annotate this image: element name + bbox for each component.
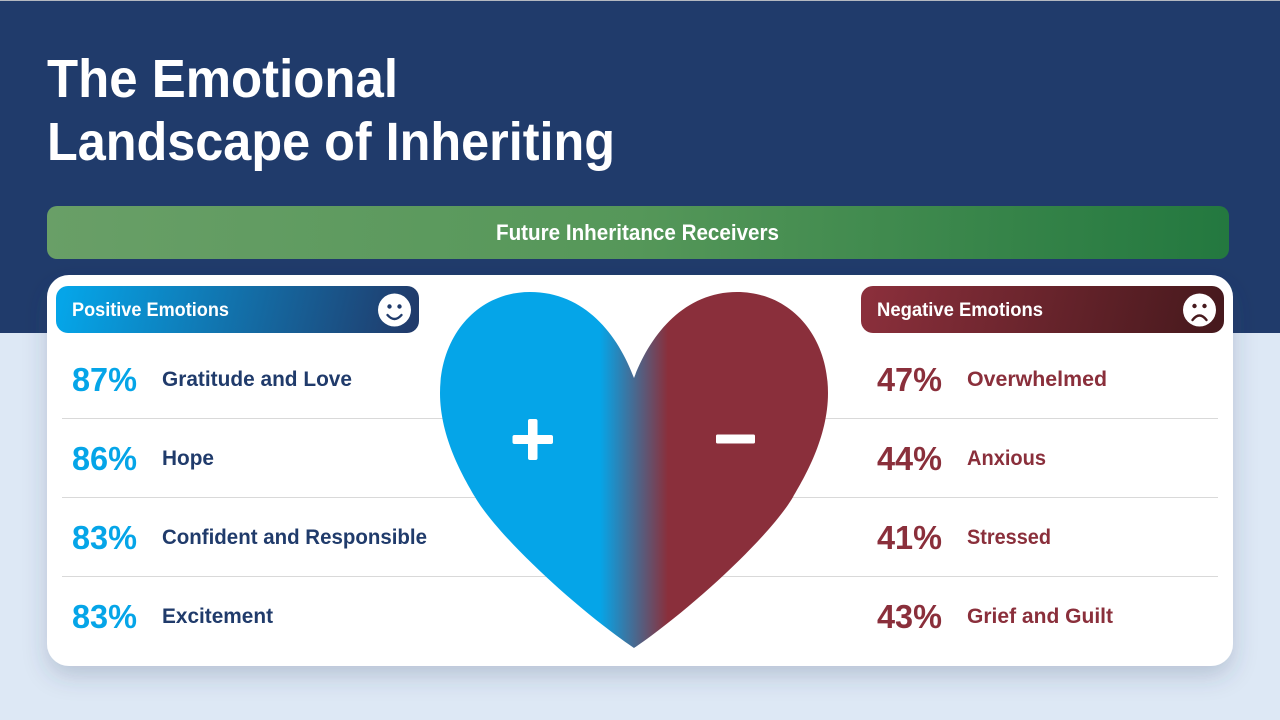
panel: negative emotions <box>861 286 1224 636</box>
row: 83% confident and responsible: Confident and Responsible <box>162 526 427 549</box>
heart graphic <box>440 292 828 648</box>
row: 43% grief and guilt: 43% <box>877 599 942 636</box>
heart shape <box>440 292 828 648</box>
row: 47% overwhelmed <box>877 362 1107 399</box>
header band <box>0 0 1280 333</box>
row: 44% anxious: Anxious <box>967 447 1046 470</box>
row: 83% excitement <box>72 599 273 636</box>
banner: future inheritance receivers <box>47 206 1229 259</box>
row: 86% hope: Hope <box>162 447 214 470</box>
icon: plus sign <box>512 419 553 460</box>
row: 83% excitement: Excitement <box>162 605 273 628</box>
row: 44% anxious: 44% <box>877 441 942 478</box>
positive header bar: Positive Emotions <box>72 300 229 321</box>
row: 41% stressed: 41% <box>877 520 942 557</box>
banner: future inheritance receivers: Future Inheritance Receivers <box>496 220 779 245</box>
row: 47% overwhelmed: 47% <box>877 362 942 399</box>
negative header bar <box>861 286 1224 333</box>
row: 87% gratitude and love: Gratitude and Love <box>162 368 352 391</box>
icon: smiley face <box>378 294 411 326</box>
row: 86% hope <box>72 441 214 478</box>
row: 43% grief and guilt: Grief and Guilt <box>967 605 1113 628</box>
title: The Emotional <box>47 49 398 109</box>
row: 83% confident and responsible: 83% <box>72 520 137 557</box>
positive header bar <box>56 286 419 333</box>
panel: positive emotions <box>56 286 427 636</box>
row: 87% gratitude and love: 87% <box>72 362 137 399</box>
row: 83% excitement: 83% <box>72 599 137 636</box>
row: 43% grief and guilt <box>877 599 1113 636</box>
row: 44% anxious <box>877 441 1046 478</box>
icon: minus sign <box>716 434 755 444</box>
title: Landscape of Inheriting <box>47 112 615 172</box>
negative header bar: Negative Emotions <box>877 300 1043 321</box>
row: 47% overwhelmed: Overwhelmed <box>967 368 1107 391</box>
row: 83% confident and responsible <box>72 520 427 557</box>
row: 41% stressed <box>877 520 1051 557</box>
row divider lines <box>62 418 1218 577</box>
title <box>47 49 615 172</box>
row: 87% gratitude and love <box>72 362 352 399</box>
row: 41% stressed: Stressed <box>967 526 1051 549</box>
main white card <box>47 275 1233 666</box>
row: 86% hope: 86% <box>72 441 137 478</box>
icon: sad face <box>1183 294 1216 326</box>
